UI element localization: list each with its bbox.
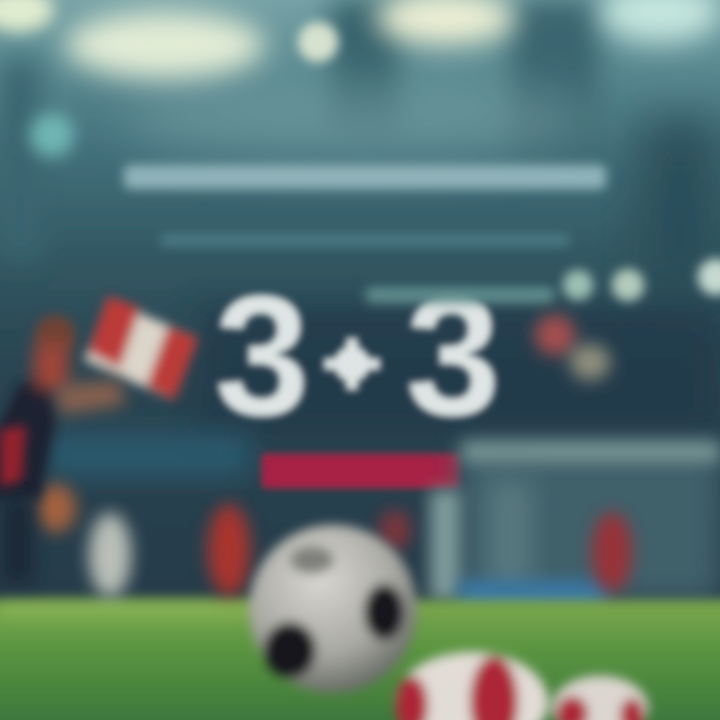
peruvian flag [84, 296, 198, 400]
blue sideline band [45, 435, 250, 475]
headline text [124, 165, 606, 189]
scoreboard panel [200, 305, 720, 435]
score: 3 [214, 260, 310, 452]
red banner [262, 454, 460, 488]
score [214, 260, 501, 452]
red and white foreground balls [396, 652, 648, 720]
scoreboard lights row [365, 259, 720, 303]
subtitle text [160, 234, 570, 246]
foreground player holding flag [0, 315, 125, 585]
background players [36, 484, 632, 597]
stadium floodlights [0, 0, 720, 157]
goal and stand [430, 442, 720, 610]
small flag on scoreboard [535, 315, 610, 380]
grass pitch [0, 600, 720, 720]
score: 3 [405, 260, 501, 452]
soccer ball [249, 525, 417, 693]
